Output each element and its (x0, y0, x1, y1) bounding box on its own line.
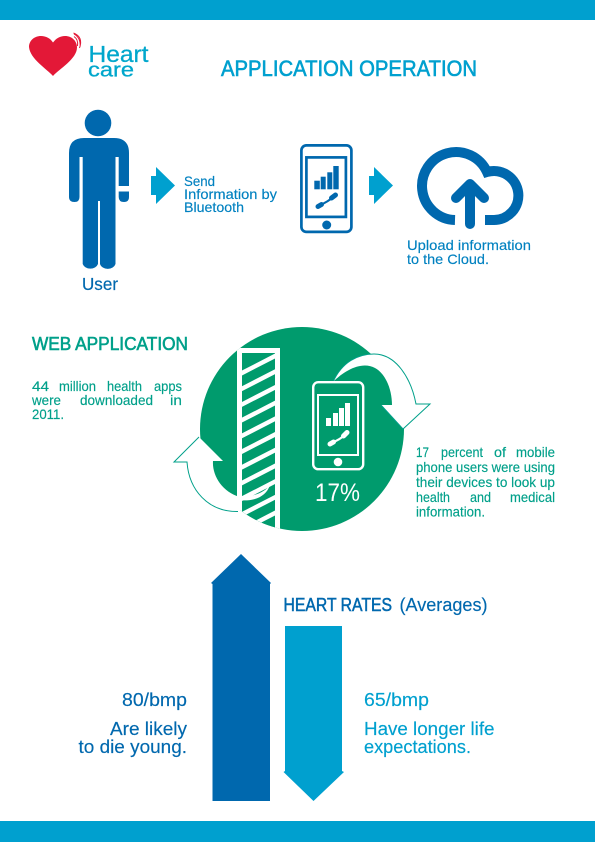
logo wordmark: care (88, 58, 134, 82)
text: 44 million: apps (154, 378, 182, 394)
heading: web application: WEB APPLICATION (32, 334, 188, 354)
text: 17 percent: mobile (516, 444, 555, 460)
text: send information: Send (184, 173, 215, 189)
icon: smartphone (301, 145, 351, 232)
text: 65 bpm (364, 690, 494, 757)
text: 80 bpm: Are likely (110, 719, 187, 739)
text: 17 percent: health (416, 489, 450, 505)
text: upload to cloud (407, 237, 531, 267)
icon: user figure (69, 110, 130, 269)
text: 17 percent: medical (510, 489, 555, 505)
text: 44 million: in (170, 392, 182, 408)
text: send information (184, 173, 277, 215)
user label: User (82, 274, 118, 294)
arrow: top right circular (333, 354, 430, 429)
text: 17 percent: and (470, 489, 491, 505)
text: 44 million: 44 (32, 378, 49, 394)
text: 44 million: downloaded (80, 392, 153, 408)
arrow: down light blue (284, 626, 344, 801)
text: send information: Information by (184, 186, 277, 202)
text: upload to cloud: to the Cloud. (407, 251, 489, 267)
logo wordmark (88, 41, 149, 82)
arrow: up dark blue (211, 554, 271, 801)
top bar (0, 0, 595, 20)
text: 44 million: health (107, 378, 142, 394)
heading: heart rates: HEART RATES (284, 595, 392, 615)
title: APPLICATION OPERATION (221, 56, 477, 81)
text: 65 bpm: 65/bmp (364, 690, 429, 710)
text: 44 million: 2011. (32, 406, 64, 422)
text: 17 percent (416, 444, 555, 520)
icon: cloud upload (422, 152, 518, 224)
icon: smartphone white (313, 382, 363, 469)
arrow: user to phone (151, 167, 175, 204)
text: send information: Bluetooth (184, 199, 244, 215)
chart: green circle with building (174, 327, 430, 540)
text: 17 percent: information. (416, 504, 485, 520)
text: 44 million: million (59, 378, 96, 394)
text: 17 percent: percent (441, 444, 483, 460)
text: 44 million: were (31, 392, 61, 408)
text: 44 million (31, 378, 182, 422)
percentage label: 17% (315, 479, 360, 507)
logo: Heart care (29, 33, 149, 82)
text: 65 bpm: expectations. (364, 737, 471, 757)
arrow: bottom left circular (174, 437, 240, 512)
text: 17 percent: their devices to look up (416, 474, 555, 490)
text: 80 bpm: 80/bmp (122, 690, 187, 710)
text: 17 percent: 17 (416, 444, 429, 460)
heading: heart rates (284, 595, 488, 615)
arrow: phone to cloud (369, 167, 393, 204)
text: 80 bpm: to die young. (78, 737, 187, 757)
text: 17 percent: phone users were using (416, 459, 555, 475)
icon: heart with signal (29, 33, 81, 76)
white building stripes (237, 348, 280, 540)
logo wordmark: Heart (88, 41, 149, 67)
text: 65 bpm: Have longer life (364, 719, 494, 739)
heading: heart rates: (Averages) (400, 595, 488, 615)
text: 17 percent: of (494, 444, 506, 460)
text: 80 bpm (78, 690, 187, 757)
text: upload to cloud: Upload information (407, 237, 531, 253)
bottom bar (0, 821, 595, 842)
